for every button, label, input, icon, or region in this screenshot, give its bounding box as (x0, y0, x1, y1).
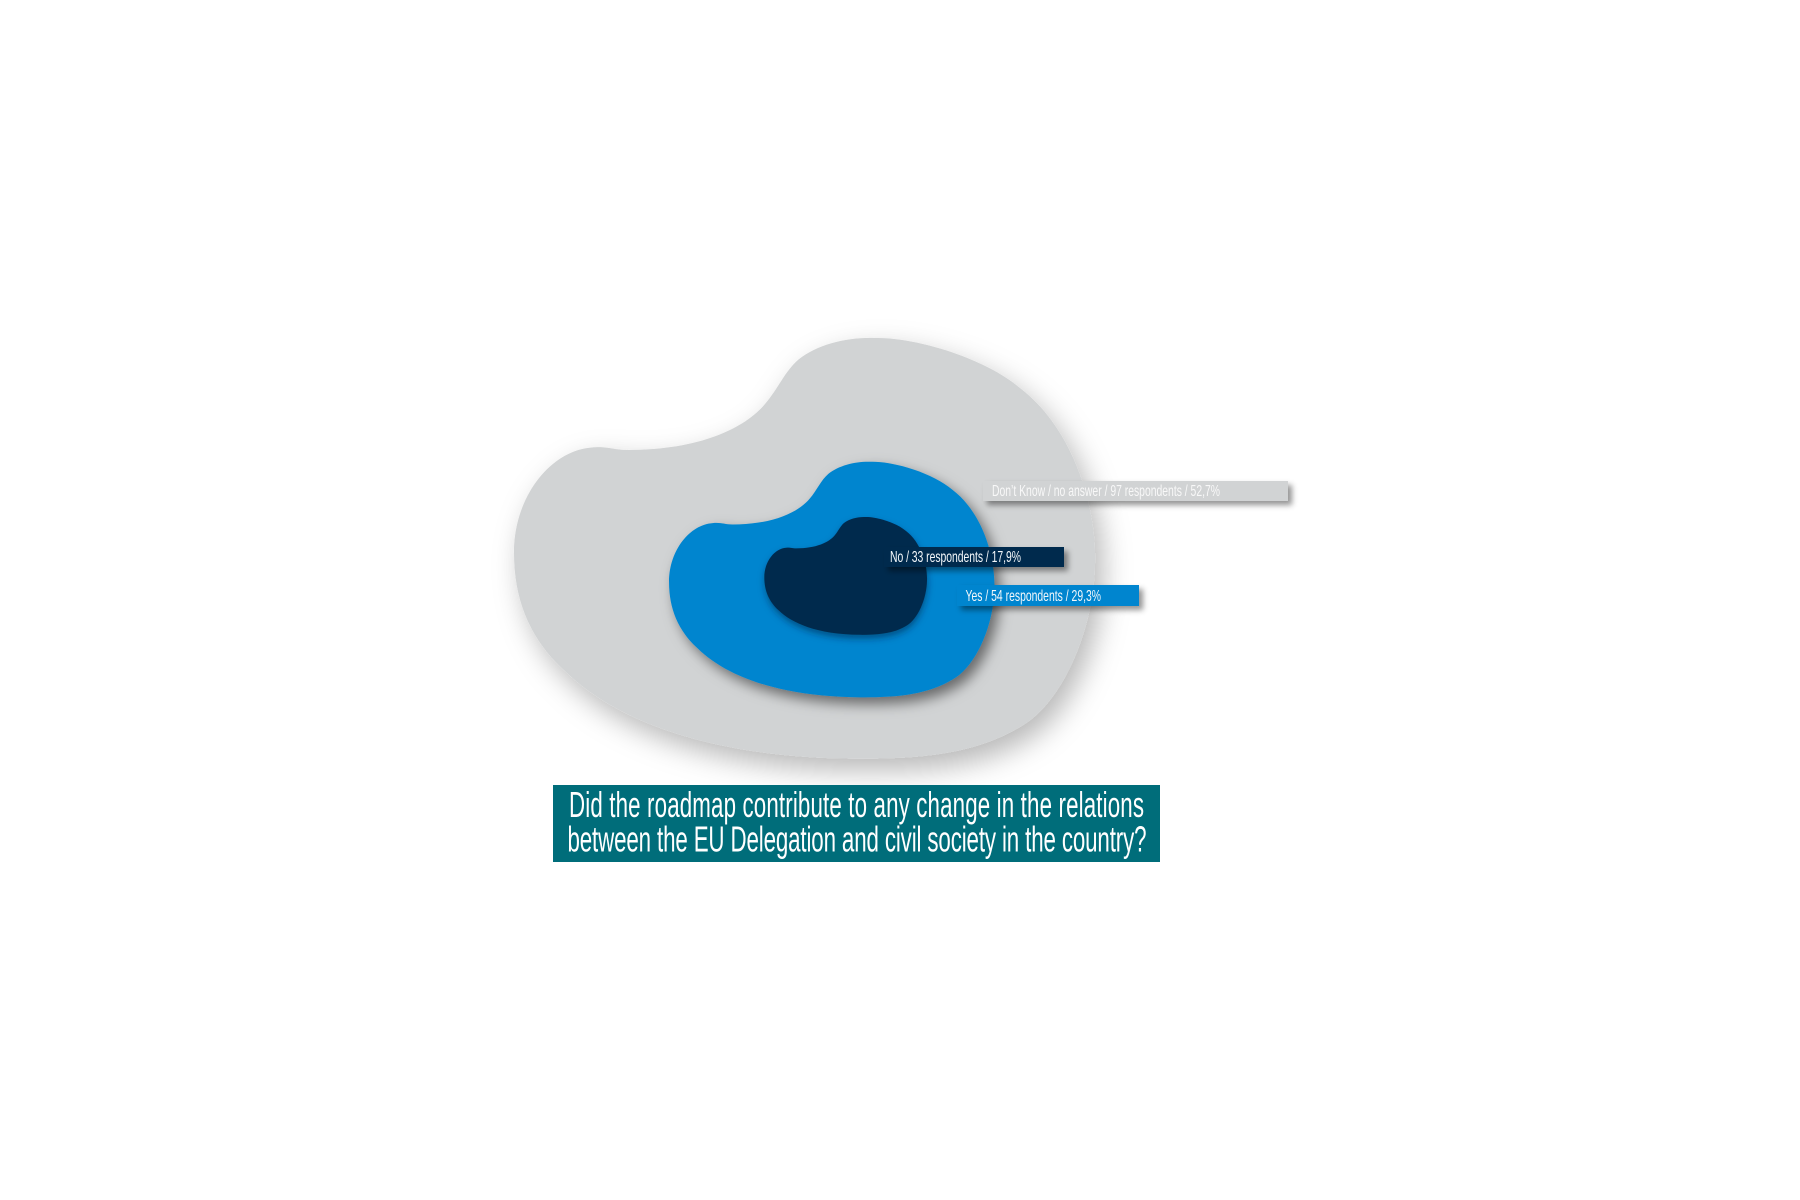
title: question banner (553, 785, 1160, 862)
blob: don't know / no answer (514, 338, 1095, 759)
blob: yes (669, 462, 994, 697)
label: no: No / 33 respondents / 17,9% (890, 548, 1021, 566)
blob: no (764, 517, 927, 635)
label: don't know / no answer: Don’t Know / no answer / 97 respondents / 52,7% (992, 482, 1220, 500)
chart: nested blobs (514, 338, 1095, 759)
label: don't know / no answer (983, 481, 1288, 501)
title: question banner: Did the roadmap contribute to any change in the relations (569, 786, 1144, 825)
title: question banner: between the EU Delegation and civil society in the country? (568, 820, 1147, 860)
label: yes: Yes / 54 respondents / 29,3% (966, 587, 1101, 605)
label: no (884, 547, 1064, 567)
label: yes (957, 585, 1139, 606)
